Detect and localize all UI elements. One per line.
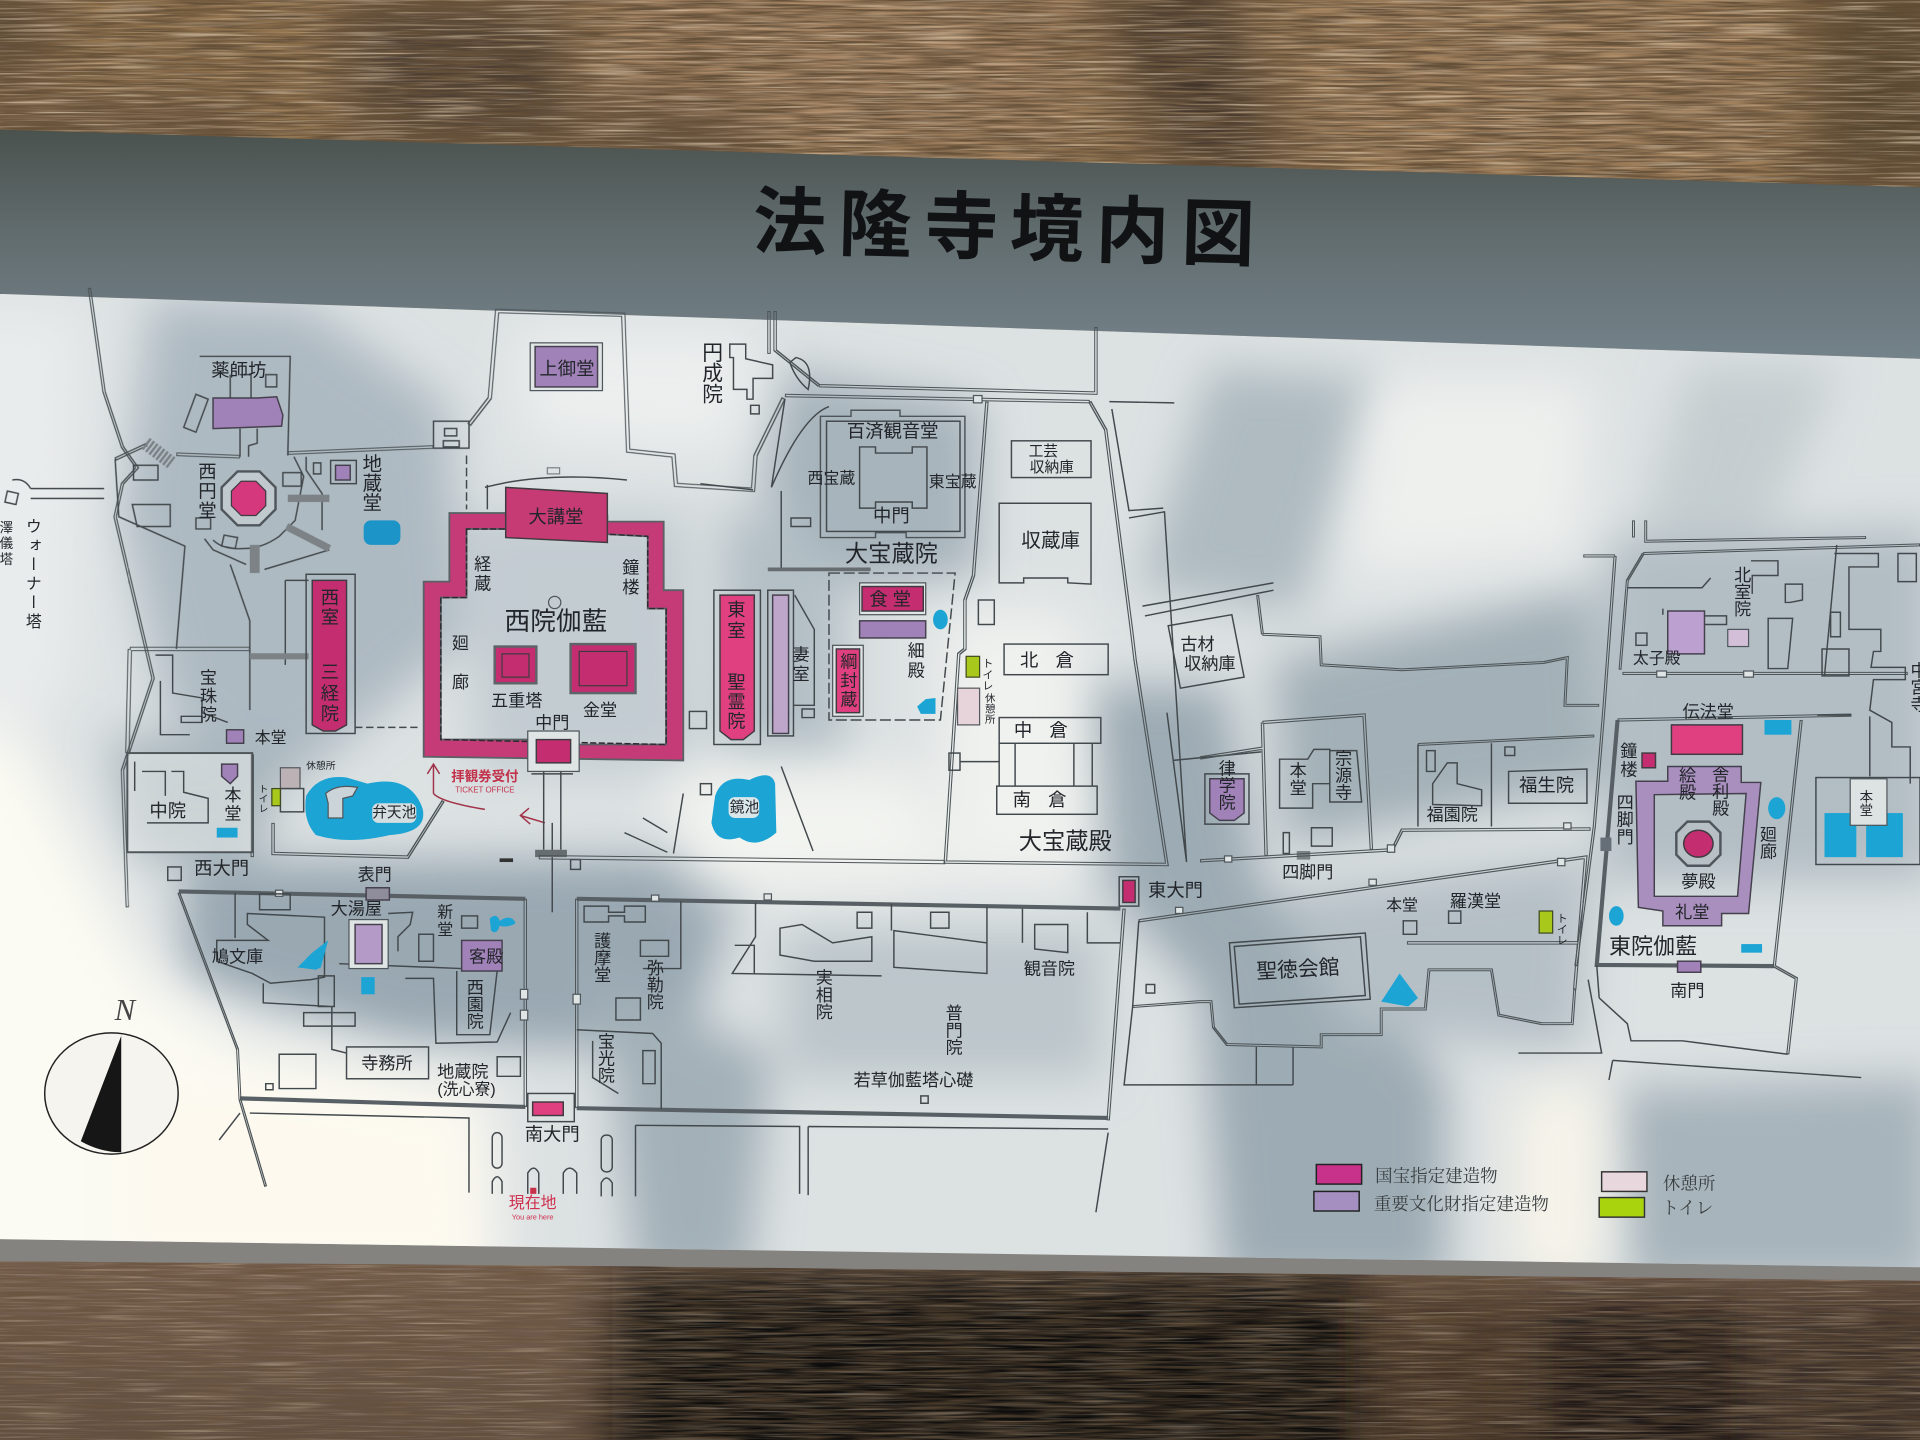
弁天池 — [305, 777, 423, 840]
四脚門 vertical: 四脚門 — [1614, 793, 1634, 846]
細殿 — [860, 621, 926, 681]
絵殿 舎利殿 — [1676, 765, 1729, 817]
中院: 本堂 — [221, 786, 241, 823]
legend: toilet: トイレ — [1662, 1195, 1713, 1220]
羅漢堂: 羅漢堂 — [1450, 891, 1501, 911]
上御堂 — [530, 343, 602, 391]
新堂: 新堂 — [435, 904, 453, 938]
south-central temples — [577, 901, 681, 1109]
実相院 普門院 観音院: 実相院 — [813, 969, 833, 1020]
聖徳会館: 聖徳会館 — [1256, 956, 1340, 983]
sign title band — [0, 130, 1920, 359]
西円堂: 西円堂 — [196, 462, 217, 520]
福園院 and 福生院: 福生院 — [1519, 774, 1574, 795]
西大門: 西大門 — [194, 858, 249, 879]
compound labels: 廊 — [452, 672, 469, 692]
収蔵庫 — [999, 503, 1091, 584]
purple corridor — [1636, 767, 1761, 926]
北室院 太子殿 — [1620, 520, 1920, 676]
compass: N — [114, 993, 137, 1027]
羅漢堂 — [1449, 891, 1501, 923]
南門: 南門 — [1670, 981, 1704, 1001]
金堂 — [571, 644, 636, 720]
西室 三経院: 西室 — [319, 588, 340, 627]
宗源寺 — [1200, 715, 1371, 856]
pond near 地蔵堂 — [364, 520, 400, 545]
聖徳会館 area — [1096, 857, 1586, 1212]
本堂: 本堂 — [1386, 897, 1418, 915]
small gate box by 東室 — [689, 711, 707, 729]
中門: 中門 — [535, 712, 569, 732]
大湯屋 — [331, 899, 388, 969]
大宝蔵院 — [700, 311, 1096, 569]
伝法堂: 伝法堂 — [1682, 701, 1734, 721]
妻室 — [790, 595, 814, 718]
central approach — [500, 767, 813, 912]
大宝蔵院: 中門 — [873, 505, 910, 526]
宗源寺: 本堂 — [1287, 762, 1307, 796]
礼堂: 礼堂 — [1675, 902, 1709, 922]
客殿 — [462, 940, 503, 971]
鏡池 — [711, 775, 776, 843]
律学院: 律学院 — [1216, 759, 1236, 811]
東室 聖霊院: 聖霊院 — [725, 672, 746, 731]
south-central temples: 護摩堂 — [591, 932, 611, 983]
食堂 — [860, 583, 926, 615]
ticket office label with arrows — [427, 764, 545, 824]
円成院 — [699, 342, 773, 414]
鏡池: 鏡池 — [730, 799, 759, 816]
古材収納庫: 収納庫 — [1184, 654, 1235, 674]
south-west temples: 鳩文庫 — [212, 946, 263, 966]
legend: toilet — [1599, 1195, 1713, 1220]
sign bottom edge strip — [0, 1239, 1920, 1281]
map drawing — [0, 288, 1920, 1222]
wooden frame top — [0, 0, 1920, 196]
休憩所 and トイレ west: トイレ — [257, 784, 268, 813]
五重塔: 五重塔 — [491, 690, 542, 710]
西院伽藍 compound — [424, 487, 683, 771]
中門 — [528, 712, 579, 771]
食堂: 食堂 — [869, 588, 916, 609]
四脚門: 四脚門 — [1282, 862, 1333, 882]
鐘楼 — [1617, 742, 1656, 779]
トイレ east: トイレ — [1555, 912, 1567, 945]
薬師坊 — [211, 359, 283, 429]
west road network — [5, 288, 784, 907]
中院 — [127, 753, 252, 852]
中倉 南倉: 南倉 — [1013, 789, 1084, 810]
実相院 普門院 観音院 — [732, 902, 1120, 1056]
トイレ east — [1539, 911, 1567, 945]
金堂: 金堂 — [583, 700, 617, 720]
compass — [45, 993, 178, 1154]
compound labels — [452, 555, 639, 692]
legend: national treasure: 国宝指定建造物 — [1375, 1163, 1498, 1188]
細殿: 細殿 — [905, 642, 925, 681]
中宮寺 complex — [1816, 553, 1920, 864]
トイレ and 休憩所 center: 休憩所 — [983, 693, 995, 725]
compound labels: 西院伽藍 — [505, 607, 607, 636]
工芸収納庫 — [1011, 441, 1091, 478]
south main road and walls — [168, 867, 1120, 1196]
gate posts on walls — [276, 396, 1753, 1020]
legend — [1314, 1163, 1715, 1220]
大講堂: 大講堂 — [528, 506, 583, 527]
トイレ and 休憩所 center: トイレ — [981, 658, 993, 691]
ウォーナー塔 label: ウォーナー塔 — [23, 518, 41, 632]
大宝蔵院: 西宝蔵 — [808, 469, 855, 487]
西園院 — [457, 971, 497, 1035]
西円堂 — [196, 462, 276, 525]
map sheet with dappled light — [0, 282, 1920, 1298]
上御堂: 上御堂 — [539, 358, 594, 379]
西園院: 西園院 — [464, 978, 484, 1030]
絵殿 舎利殿: 絵殿 — [1676, 767, 1696, 801]
大湯屋: 大湯屋 — [331, 899, 382, 919]
parking islands — [492, 1133, 612, 1196]
south-central temples: 宝光院 — [595, 1032, 615, 1084]
you are here marker: You are here — [512, 1213, 554, 1222]
宝珠院: 本堂 — [255, 729, 287, 747]
中院: 中院 — [149, 800, 186, 821]
title: 法隆寺境内図: 法隆寺境内図 — [752, 163, 1269, 283]
寺務所: 寺務所 — [361, 1053, 413, 1073]
工芸収納庫: 収納庫 — [1030, 459, 1074, 476]
古材収納庫: 古材 — [1180, 634, 1215, 654]
若草伽藍塔心礎: 若草伽藍塔心礎 — [854, 1070, 973, 1090]
実相院 普門院 観音院: 観音院 — [1024, 959, 1075, 979]
西室 三経院 — [306, 574, 355, 733]
休憩所 and トイレ west — [257, 759, 336, 813]
四脚門 vertical — [1600, 793, 1634, 851]
表門 — [358, 864, 392, 900]
ticket office label with arrows: 拝観券受付 — [451, 768, 519, 784]
大講堂 — [506, 487, 607, 542]
legend: rest area: 休憩所 — [1663, 1170, 1715, 1195]
北倉: 北倉 — [1020, 649, 1091, 670]
大宝蔵殿 enclosure: 大宝蔵殿 — [1019, 828, 1112, 854]
legend: rest area — [1602, 1170, 1715, 1195]
you are here marker — [509, 1188, 557, 1222]
妻室: 妻室 — [790, 645, 810, 684]
東大門: 東大門 — [1148, 880, 1203, 901]
綱封蔵 — [833, 645, 863, 716]
宝珠院 — [156, 655, 287, 747]
福園院 and 福生院 — [1200, 736, 1594, 861]
wooden frame bottom — [0, 1249, 1920, 1440]
収蔵庫: 収蔵庫 — [1021, 530, 1080, 552]
compound labels: 経蔵 — [471, 555, 491, 594]
purple long hall — [768, 590, 793, 736]
東院伽藍 — [1518, 556, 1908, 1080]
中宮寺 complex: 本堂 — [1857, 790, 1873, 817]
東大門 — [1119, 877, 1203, 906]
五重塔 — [491, 647, 542, 710]
本堂 — [1386, 897, 1418, 934]
夢殿 — [1676, 822, 1720, 892]
表門: 表門 — [358, 864, 392, 884]
古材収納庫 — [1168, 615, 1244, 688]
compound labels: 鐘楼 — [619, 558, 639, 598]
新堂 — [435, 904, 478, 938]
円成院: 円成院 — [699, 342, 723, 404]
地蔵院: 地蔵院 — [437, 1061, 489, 1081]
西室 三経院: 三経院 — [319, 662, 340, 725]
若草伽藍塔心礎 — [854, 1070, 973, 1103]
休憩所 and トイレ west: 休憩所 — [306, 759, 336, 772]
south-central temples: 弥勒院 — [644, 959, 664, 1010]
south-west temples — [212, 893, 520, 1098]
聖徳会館 — [1229, 933, 1370, 1008]
宝珠院: 宝珠院 — [197, 669, 217, 724]
南大門: 南大門 — [525, 1123, 580, 1144]
鐘楼: 鐘楼 — [1617, 742, 1637, 779]
四脚門 — [1282, 851, 1333, 882]
legend: national treasure — [1316, 1163, 1498, 1188]
絵殿 舎利殿: 舎利殿 — [1709, 765, 1729, 817]
north east wall line — [1258, 595, 1599, 705]
compound labels: 廻 — [452, 633, 469, 653]
北室院 太子殿: 北室院 — [1731, 566, 1751, 617]
大宝蔵院: 百済観音堂 — [847, 421, 939, 442]
中倉 南倉 — [960, 718, 1101, 814]
ticket office label with arrows: TICKET OFFICE — [455, 785, 515, 794]
南大門 — [525, 1093, 580, 1144]
東室 聖霊院 — [714, 590, 760, 744]
北倉 — [1004, 644, 1108, 675]
中倉 南倉: 中倉 — [1014, 719, 1085, 740]
薬師坊: 薬師坊 — [211, 359, 266, 380]
大宝蔵殿 enclosure — [539, 402, 1273, 864]
大宝蔵院: 大宝蔵院 — [845, 540, 938, 566]
東院伽藍 label: 東院伽藍 — [1609, 934, 1697, 959]
綱封蔵 and 食堂 court — [829, 573, 955, 720]
福園院 and 福生院: 福園院 — [1427, 804, 1478, 824]
地蔵堂: 地蔵堂 — [359, 453, 382, 512]
工芸収納庫: 工芸 — [1029, 443, 1058, 460]
洗心寮: (洗心寮) — [437, 1080, 496, 1098]
大宝蔵院: 東宝蔵 — [929, 473, 977, 491]
北室院 太子殿: 太子殿 — [1633, 649, 1681, 667]
廻廊: 廻廊 — [1757, 825, 1777, 860]
律学院 — [1205, 759, 1249, 824]
客殿: 客殿 — [469, 946, 503, 966]
宗源寺: 宗源寺 — [1332, 749, 1352, 801]
夢殿: 夢殿 — [1681, 872, 1715, 892]
伝法堂 — [1671, 701, 1742, 754]
寺務所 — [347, 1047, 429, 1079]
弁天池: 弁天池 — [372, 804, 417, 821]
legend: important cultural property: 重要文化財指定建造物 — [1374, 1191, 1549, 1216]
東室 聖霊院: 東室 — [725, 600, 746, 642]
南門 — [1670, 961, 1704, 1001]
実相院 普門院 観音院: 普門院 — [943, 1004, 963, 1056]
綱封蔵: 綱封蔵 — [837, 653, 857, 710]
トイレ and 休憩所 center — [958, 656, 995, 725]
地蔵堂 — [331, 453, 382, 512]
you are here marker: 現在地 — [509, 1194, 557, 1212]
